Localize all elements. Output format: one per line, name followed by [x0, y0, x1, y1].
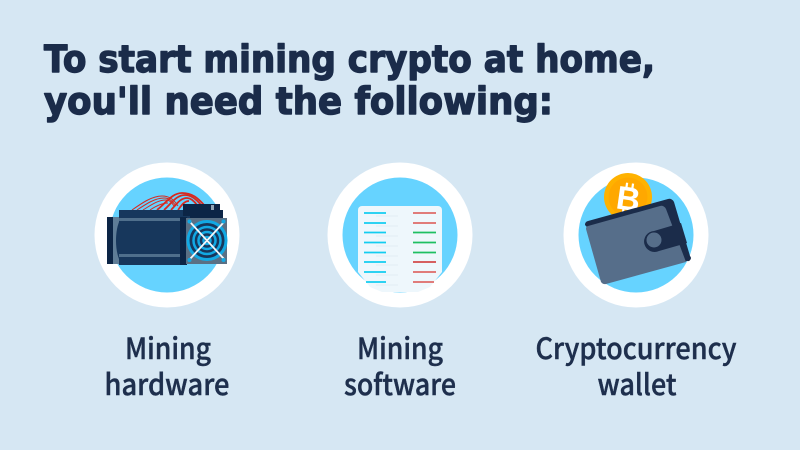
icon: bitcoin coin: B	[614, 179, 643, 219]
label: cryptocurrency wallet: Cryptocurrency	[536, 326, 737, 368]
label: mining hardware: Mining	[125, 326, 211, 368]
label: mining software: Mining	[357, 326, 443, 368]
title	[44, 38, 655, 123]
title: you'll need the following:	[44, 80, 553, 123]
panel: mining hardware	[94, 162, 240, 404]
label: cryptocurrency wallet	[536, 326, 737, 404]
icon: cryptocurrency wallet	[564, 162, 708, 308]
label: cryptocurrency wallet: wallet	[598, 362, 677, 404]
label: mining software	[344, 326, 456, 404]
icon: mining hardware	[94, 162, 240, 308]
label: mining hardware: hardware	[104, 362, 230, 404]
label: mining hardware	[104, 326, 230, 404]
icon: bitcoin coin	[604, 173, 652, 221]
panel: cryptocurrency wallet	[536, 162, 737, 404]
panel: mining software	[328, 162, 472, 404]
title: To start mining crypto at home,	[44, 38, 655, 81]
label: mining software: software	[344, 362, 456, 404]
icon: mining software	[328, 162, 472, 308]
